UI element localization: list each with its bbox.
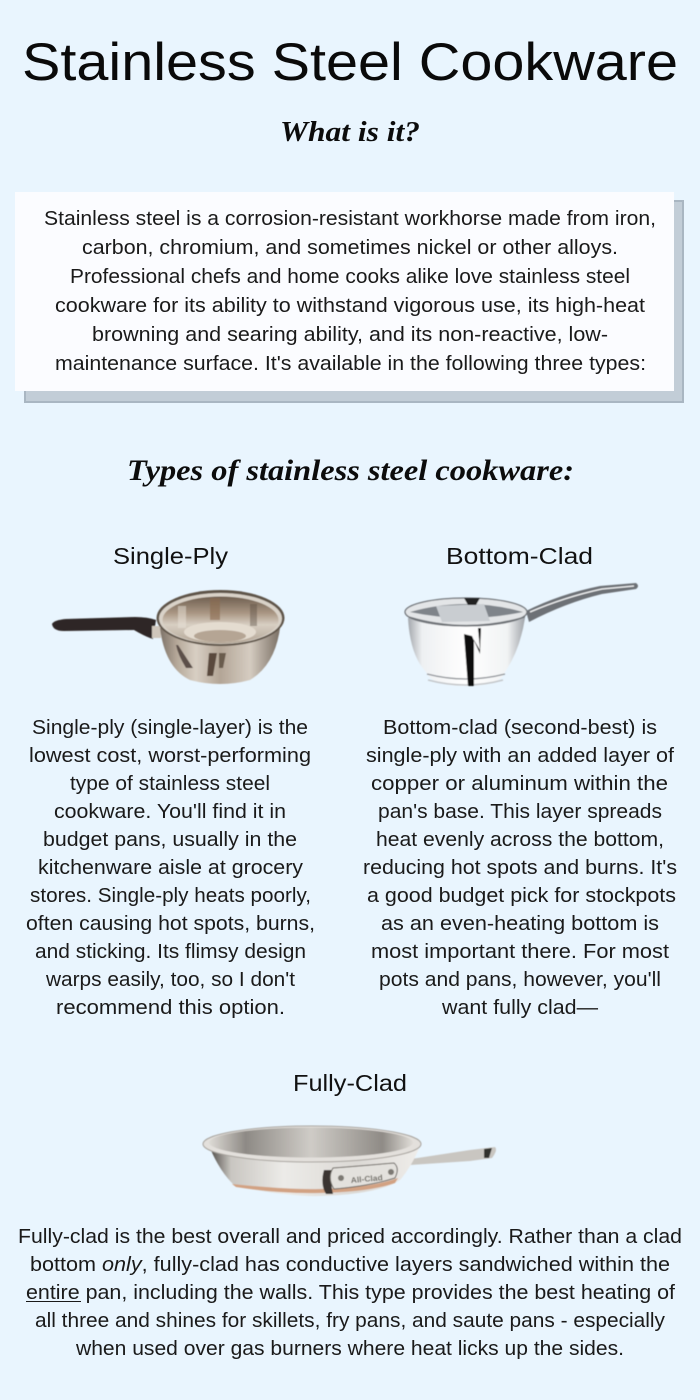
panel: fully-clad xyxy=(203,1070,496,1196)
intro text: cookware for its ability to withstand vigorous use, its high-heat xyxy=(55,295,645,317)
text: single-ply description: stores. Single-ply heats poorly, xyxy=(30,885,311,907)
text: bottom-clad description: heat evenly across the bottom, xyxy=(376,829,664,851)
panel: introduction xyxy=(15,192,683,402)
intro text: carbon, chromium, and sometimes nickel or other alloys. xyxy=(82,237,618,259)
panel: single-ply xyxy=(52,543,284,684)
icon: fully-clad pan xyxy=(203,1126,496,1196)
text: single-ply description: cookware. You'll find it in xyxy=(54,801,286,823)
heading: bottom-clad: Bottom-Clad xyxy=(446,543,593,569)
text: bottom-clad description: want fully clad— xyxy=(441,997,598,1019)
heading: single-ply: Single-Ply xyxy=(113,543,229,569)
text: single-ply description: often causing hot spots, burns, xyxy=(26,913,315,935)
heading: fully-clad: Fully-Clad xyxy=(293,1070,407,1096)
text: bottom-clad description: single-ply with an added layer of xyxy=(366,745,674,767)
text: bottom-clad description: pan's base. This layer spreads xyxy=(378,801,662,823)
text: single-ply description: recommend this option. xyxy=(56,997,285,1019)
heading: types: Types of stainless steel cookware: xyxy=(127,454,574,487)
intro text xyxy=(44,208,656,375)
text: single-ply description: type of stainless steel xyxy=(70,773,270,795)
text: fully-clad description: bottom only, fully-clad has conductive layers sandwiched within the xyxy=(30,1254,670,1276)
heading: what is it: What is it? xyxy=(280,116,420,148)
text: fully-clad description: all three and shines for skillets, fry pans, and saute pans - especially xyxy=(35,1310,665,1332)
text: fully-clad description xyxy=(18,1226,682,1360)
panel card xyxy=(15,192,674,391)
text: bottom-clad description xyxy=(363,717,677,1019)
text: fully-clad description: entire pan, including the walls. This type provides the best heating of xyxy=(26,1282,675,1304)
text: single-ply description: warps easily, too, so I don't xyxy=(45,969,295,991)
icon: fully-clad pan: All-Clad xyxy=(350,1173,383,1185)
intro text: Stainless steel is a corrosion-resistant workhorse made from iron, xyxy=(44,208,656,230)
icon: bottom-clad pan xyxy=(405,583,638,686)
intro text: Professional chefs and home cooks alike love stainless steel xyxy=(70,266,630,288)
text: bottom-clad description: a good budget pick for stockpots xyxy=(367,885,676,907)
icon: single-ply pan xyxy=(52,590,284,684)
text: single-ply description: and sticking. Its flimsy design xyxy=(35,941,306,963)
text: single-ply description: budget pans, usually in the xyxy=(43,829,297,851)
text: fully-clad description: Fully-clad is the best overall and priced accordingly. Rather than a clad xyxy=(18,1226,682,1248)
panel shadow xyxy=(25,201,683,402)
intro text: browning and searing ability, and its non-reactive, low- xyxy=(92,324,608,346)
text: single-ply description: Single-ply (single-layer) is the xyxy=(32,717,308,739)
text: single-ply description: kitchenware aisle at grocery xyxy=(38,857,303,879)
text: fully-clad description: when used over gas burners where heat licks up the sides. xyxy=(75,1338,624,1360)
text: bottom-clad description: as an even-heating bottom is xyxy=(381,913,659,935)
text: single-ply description xyxy=(26,717,315,1019)
text: bottom-clad description: copper or aluminum within the xyxy=(371,773,668,795)
title: Stainless Steel Cookware xyxy=(22,33,678,92)
text: bottom-clad description: pots and pans, however, you'll xyxy=(379,969,661,991)
intro text: maintenance surface. It's available in the following three types: xyxy=(55,353,646,375)
text: single-ply description: lowest cost, worst-performing xyxy=(29,745,311,767)
panel: bottom-clad xyxy=(405,543,638,686)
text: bottom-clad description: most important there. For most xyxy=(371,941,669,963)
text: bottom-clad description: reducing hot spots and burns. It's xyxy=(363,857,677,879)
text: bottom-clad description: Bottom-clad (second-best) is xyxy=(383,717,657,739)
